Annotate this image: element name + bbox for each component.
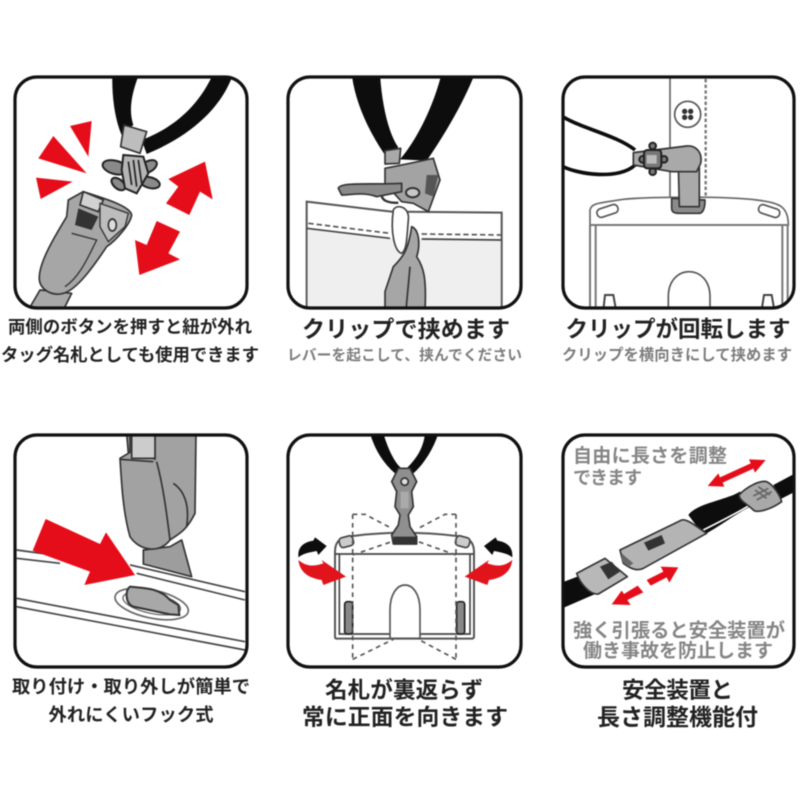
caption [1,317,259,365]
arrow: red right [647,567,678,586]
icon: black lanyard straps [352,73,475,161]
icon: hook and lower clip [385,207,425,310]
frame [563,77,794,308]
note: adjust length [573,445,727,488]
strap with slot [17,550,245,650]
note: safety release: 働き事故を防止します [583,640,773,662]
arrow: red push [33,519,135,585]
illustration: safety breakaway [560,459,798,609]
panel: detachable strap [1,73,259,365]
panel: rotating clip [560,73,794,364]
sub caption: クリップを横向きにして挟めます [562,346,792,364]
panel: safety device [560,435,798,730]
icon: center connector [620,520,707,570]
caption: クリップで挟めます [302,316,510,342]
caption: 長さ調整機能付 [597,704,758,730]
icon: lower clip with strap [28,192,132,310]
note: safety release [573,619,785,662]
illustration: badge with swivel [298,433,512,659]
icon: red burst triangles [36,121,92,199]
illustration: rotated clip [560,73,788,310]
illustration: buckle separating [28,73,233,310]
icon: left buckle [577,558,627,594]
badge holder [590,197,788,310]
note: safety release: 強く引張ると安全装置が [573,619,785,642]
icon: clip body [120,433,196,577]
icon: L-shaped swivel clip [633,143,705,213]
dashed rotation outline [353,514,456,659]
caption [597,678,758,730]
badge holder [335,533,474,639]
caption: 常に正面を向きます [302,704,508,730]
icon: black lanyard straps [370,433,438,473]
illustration: clip on card [307,73,502,310]
arrow: red down-left [135,221,180,275]
panel: stays facing front [288,433,521,730]
icon: black lanyard straps [112,73,233,154]
caption: タッグ名札としても使用できます [1,345,259,365]
illustration: hook into slot [17,433,245,650]
panel: hook [12,433,250,725]
thin black lanyard [560,115,635,174]
arrows: left rotation [298,537,346,585]
frame [15,77,247,308]
caption: 両側のボタンを押すと紐が外れ [8,317,252,337]
frame [563,435,794,667]
card sleeve [307,202,502,310]
frame [288,435,521,667]
garment placket with button [670,73,706,200]
frame [288,77,521,308]
caption [12,676,250,725]
arrow: red double upper [708,459,766,487]
caption: 名札が裏返らず [325,677,483,703]
caption: 外れにくいフック式 [48,704,214,725]
caption: 取り付け・取り外しが簡単で [12,676,250,697]
icon: upper buckle [101,125,161,193]
panel: clip [287,73,522,364]
note: adjust length: 自由に長さを調整 [573,445,727,467]
arrows: right rotation [465,537,512,585]
icon: swivel clip [392,468,417,544]
frame [15,435,247,667]
icon: clip body with lever [338,148,440,212]
black strap [560,472,798,609]
icon: adjuster [739,481,782,511]
sub caption: レバーを起こして、挟んでください [287,347,522,364]
caption: クリップが回転します [566,316,790,342]
note: adjust length: できます [573,468,642,488]
arrow: red up-right [166,162,213,215]
caption [302,677,508,730]
arrow: red left [612,586,643,605]
caption: 安全装置と [622,678,733,703]
